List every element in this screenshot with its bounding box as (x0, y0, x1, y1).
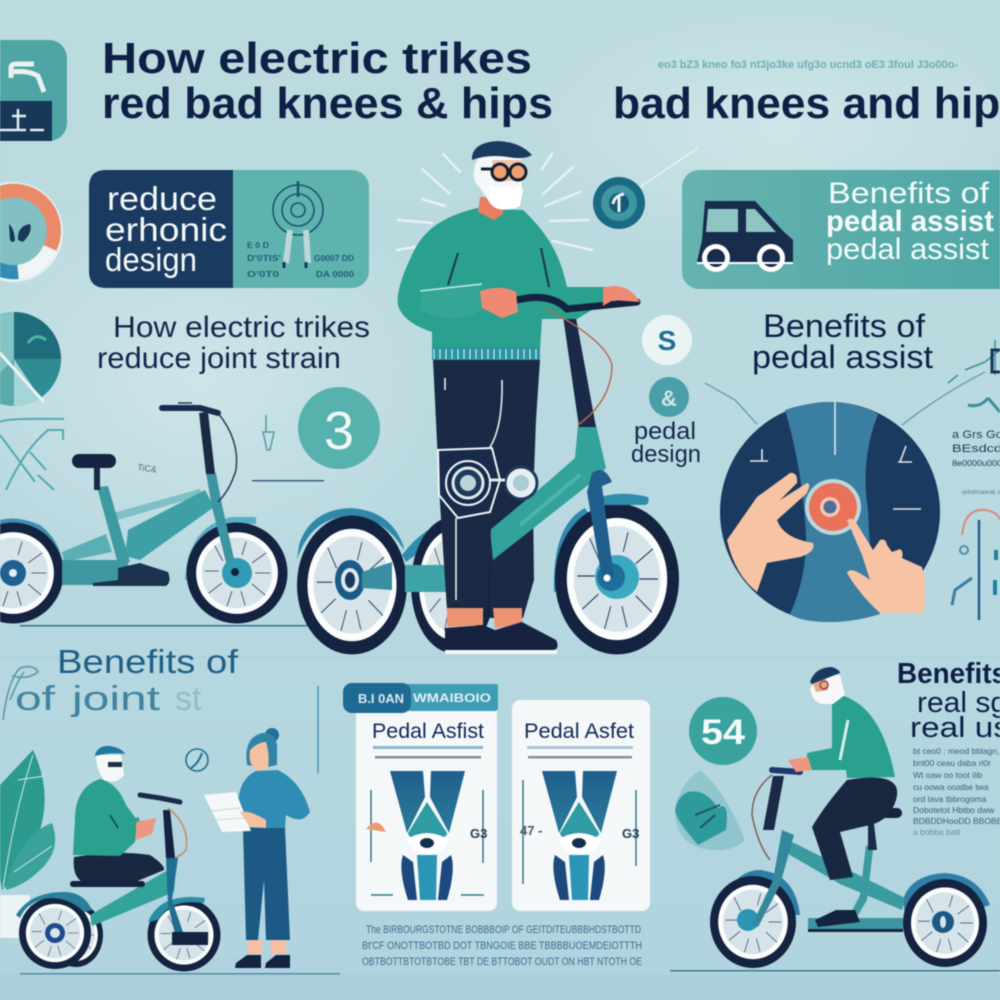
icon: top-left app tile (0, 40, 67, 141)
panel: reduce ergonomic design (89, 170, 369, 288)
illustration: main rider and trike (297, 141, 679, 654)
tiny labels: DA 0000 (316, 270, 355, 279)
badge: number 3 (298, 387, 380, 469)
cap (472, 141, 532, 160)
icon: blurred teal blob (675, 770, 745, 850)
text: benefits of joint strain (15, 643, 239, 718)
man legs (74, 853, 164, 882)
panel text: pedal assist (826, 233, 990, 266)
text: reduce joint strain (97, 311, 370, 375)
socks and shoes (447, 608, 522, 628)
text: garbled body copy: a bobba batt (913, 827, 961, 837)
text: garbled body copy: cu oowa ooatbe twa (913, 782, 989, 792)
knee hex joint (438, 448, 537, 518)
head (474, 150, 522, 210)
illustration: left trike (0, 403, 288, 624)
text: benefits of joint strain: of (15, 680, 56, 718)
card: pedal assist left: Pedal Asfist (372, 720, 484, 743)
text: reduce joint strain: How electric trikes (113, 311, 370, 344)
front wheel (554, 508, 590, 592)
brake cable (545, 308, 612, 425)
icon: joint target (273, 181, 323, 268)
knee diagram: G3 (622, 826, 639, 841)
card: pedal assist left (356, 700, 497, 911)
divider dash (252, 480, 324, 482)
icon: car (697, 201, 793, 272)
rear trike fender and wheels (402, 522, 450, 562)
panel text: erhonic (105, 211, 227, 248)
card: pedal assist right (512, 700, 650, 911)
caption text (362, 924, 642, 968)
frame (113, 489, 203, 520)
man torso (73, 779, 142, 856)
legs (812, 778, 897, 880)
title: main heading left: red bad knees & hips (102, 79, 553, 128)
badge: S: S (658, 325, 676, 356)
panel text: design (105, 241, 197, 278)
right hand (847, 519, 925, 613)
garbled caption above heading right: eo3 bZ3 kneo fo3 nt3jo3ke ufg3o ucnd3 oE3 3foul J3o00o- (658, 59, 958, 71)
label: sketch tag: TiC& (137, 462, 158, 475)
title: main heading left (102, 34, 553, 128)
icon: small pictogram (263, 415, 274, 450)
badge: number 54: 54 (701, 713, 746, 752)
text: garbled body copy: bt ceo0 : meod bblagn, (913, 746, 999, 756)
right hand and handlebar (517, 297, 637, 309)
text: garbled body copy: ord lava tbbrogoma (913, 794, 987, 804)
badge: top centre circular icon (593, 177, 645, 229)
tag header (343, 683, 498, 713)
illustration: anatomy sketch right (952, 510, 1000, 620)
tag header: WMAIBOIO (413, 691, 491, 705)
caption text: OBTBOTTBTOTBTOBE TBT DE BTTOBOT OUDT ON HBT NTOTH OE (362, 956, 642, 968)
ground line: left trike (20, 625, 310, 626)
illustration: rider on right trike (710, 667, 990, 968)
illustration: plant (0, 750, 55, 938)
text: garbled right note: 8e0000u000 (952, 459, 1000, 468)
icon: sketch scribble (3, 667, 38, 720)
caption text: The BIRBOURGSTOTNE BOBBBOIP OF GEITDITEUBBBHDSTBOTTD (366, 924, 641, 936)
knee diagram: 47 - (520, 823, 542, 838)
stem (562, 307, 596, 427)
icon: branching sketch top right (948, 340, 1000, 412)
tiny labels: E 0 D (247, 241, 269, 250)
badge: number 3: 3 (324, 401, 354, 461)
badge: pedal design icon (649, 377, 689, 417)
icon: sketch lines left (0, 419, 64, 490)
panel: comparison cards (343, 683, 650, 968)
title: main heading left: How electric trikes (102, 34, 532, 83)
panel text: pedal assist (826, 205, 994, 238)
torso (807, 693, 895, 778)
badge: pedal design icon: & (661, 386, 677, 411)
text: benefits of joint strain: joint (71, 680, 161, 718)
panel text: Benefits of (828, 177, 990, 210)
text: garbled body copy: Wt oaw oo toot ilib (913, 770, 983, 780)
panel text: reduce (107, 180, 217, 217)
text: garbled body copy (913, 746, 1000, 837)
red joint target (805, 479, 861, 535)
text: pedal design: design (631, 441, 701, 468)
glasses (481, 164, 526, 180)
panel: benefits of pedal assist (682, 170, 1000, 289)
man head (96, 755, 124, 782)
panel text (105, 180, 227, 278)
right leg (490, 360, 540, 618)
caption text: Bt'CF ONOTTBOTBD DOT TBNGOIE BBE TBBBBUOEMDEIOTTTH (362, 940, 642, 952)
text: benefits of pedal assist: pedal assist (752, 339, 933, 375)
icon: small circle tick (186, 749, 208, 771)
text: pedal design (631, 418, 701, 468)
knee diagram (520, 771, 639, 900)
text: benefits of joint strain: Benefits of (57, 643, 239, 680)
text: garbled body copy: bnt00 ceau daba ri0r (913, 758, 991, 768)
tiny labels (247, 241, 355, 279)
rays (397, 154, 592, 250)
text: benefits real use: real us (910, 712, 1000, 744)
text: garbled right note: whitnaeat e (961, 490, 1000, 496)
illustration: woman with paper (204, 686, 318, 968)
text: garbled right note: a Grs Gc (952, 429, 1000, 441)
text: garbled right note: BEsdcd (952, 443, 1000, 455)
text: benefits real use (897, 658, 1000, 744)
badge: number 54 (689, 697, 757, 765)
text: reduce joint strain: reduce joint strain (97, 342, 341, 375)
base bar (405, 565, 447, 592)
knee diagram: G3 (470, 826, 487, 841)
connector lines to knee circle (705, 372, 985, 425)
text: benefits of pedal assist: Benefits of (763, 308, 925, 344)
text: garbled right note (952, 429, 1000, 496)
sweater (398, 208, 605, 350)
tiny labels: G0007 DD (314, 254, 354, 263)
left leg (433, 360, 505, 610)
tiny labels: O'0T0 (247, 270, 280, 279)
left hand (727, 473, 813, 592)
card: pedal assist right: Pedal Asfet (524, 720, 634, 743)
ground line: bottom right (670, 970, 1000, 972)
neck (478, 197, 503, 220)
text: benefits of joint strain: st (175, 680, 202, 718)
illustration: seated man on small trike (16, 746, 220, 972)
text: garbled body copy: Dobotetot Hbtbo dww (913, 805, 995, 815)
icon: donut chart (0, 182, 63, 282)
illustration: knee circle with hands (720, 402, 940, 622)
frame (782, 842, 905, 910)
text: benefits of pedal assist (752, 308, 933, 375)
text: pedal design: pedal (634, 418, 696, 445)
tiny labels: D'0TIS' (247, 254, 281, 263)
panel text (826, 177, 994, 266)
fork and head (587, 470, 614, 578)
ground line: bottom left (20, 973, 340, 974)
knee diagram (366, 771, 487, 900)
badge: S (642, 315, 692, 365)
tag header: B.I 0AN (358, 691, 404, 706)
icon: pie chart (0, 312, 61, 406)
connector line (640, 148, 698, 187)
frame (490, 425, 606, 560)
head (810, 675, 845, 704)
